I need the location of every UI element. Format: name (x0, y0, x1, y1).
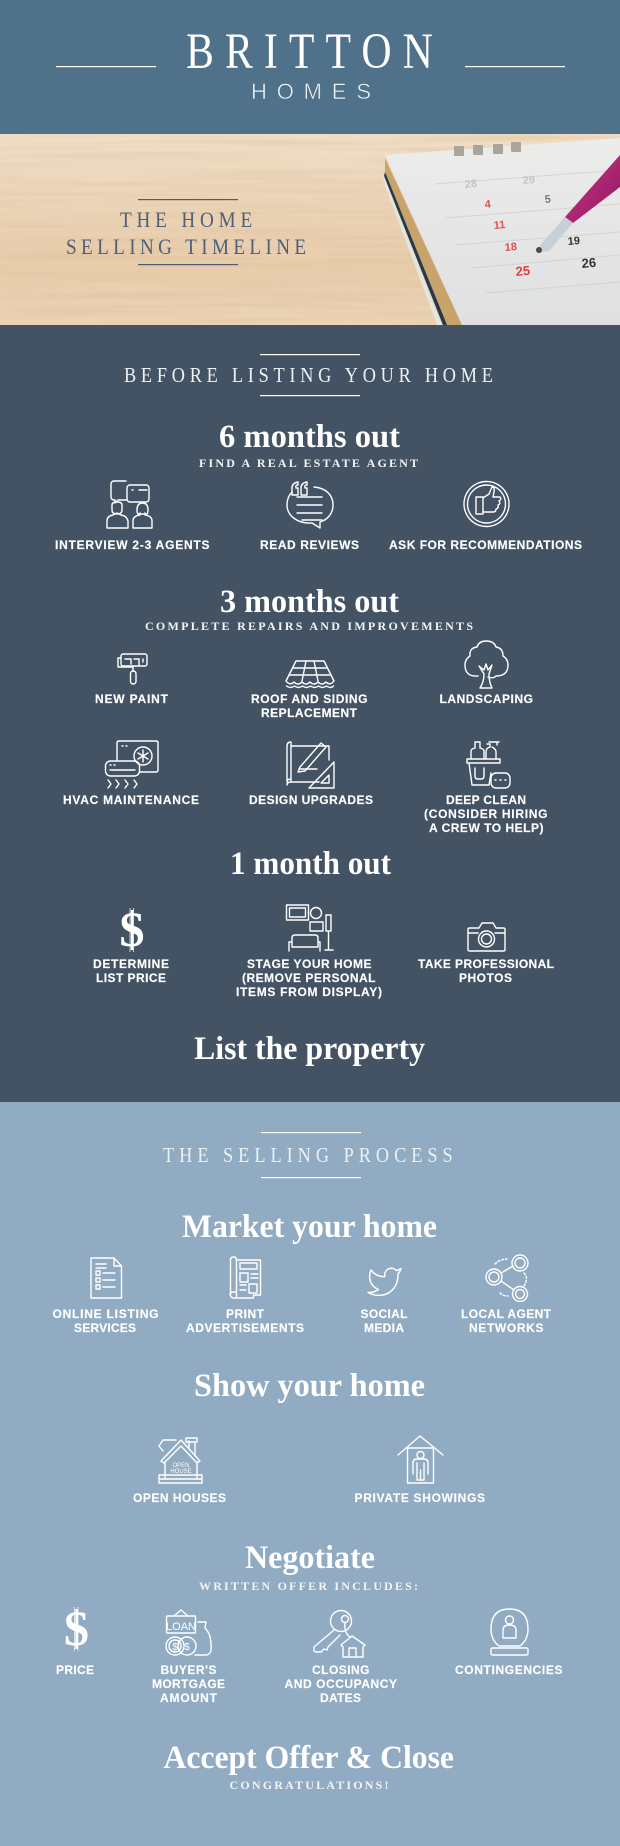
icon: tree (465, 641, 508, 688)
icon: house key (314, 1610, 365, 1657)
icon: open house: HOUSE (170, 1469, 192, 1475)
step: online listing services (52, 1258, 158, 1335)
panel: before listing your home (0, 325, 620, 1102)
label (461, 1307, 552, 1335)
label (236, 957, 382, 999)
label: PRICE (56, 1663, 94, 1677)
step: buyer's mortgage amount (152, 1610, 225, 1705)
label: MORTGAGE (152, 1677, 225, 1691)
heading: show your home: Show your home (194, 1368, 425, 1404)
subheading: find an agent: FIND A REAL ESTATE AGENT (199, 456, 418, 470)
label: MEDIA (364, 1321, 404, 1335)
icon: blueprint, pencil and set square (287, 742, 334, 788)
label (186, 1307, 304, 1335)
panel: hero photo with calendar: 19 (567, 235, 580, 248)
subheading: written offer: WRITTEN OFFER INCLUDES: (199, 1579, 418, 1593)
label: LIST PRICE (96, 971, 166, 985)
step: landscaping (440, 641, 533, 706)
step: private showings (354, 1436, 485, 1505)
step: local agent networks (461, 1255, 552, 1335)
label: ITEMS FROM DISPLAY) (236, 985, 382, 999)
icon: dollar sign: $ (64, 1600, 89, 1656)
heading: market your home: Market your home (182, 1209, 437, 1245)
step: read reviews (260, 482, 359, 552)
icon: document checklist (91, 1258, 122, 1298)
heading: negotiate: Negotiate (245, 1540, 375, 1576)
icon: cleaning bucket (467, 742, 510, 788)
panel: header (0, 0, 620, 134)
panel: hero photo with calendar (0, 134, 620, 325)
panel: hero photo with calendar: 29 (522, 174, 535, 187)
section heading: before listing: BEFORE LISTING YOUR HOME (124, 364, 493, 387)
panel: hero photo with calendar: 28 (464, 178, 477, 191)
step: design upgrades (249, 742, 373, 807)
icon: person in house (398, 1436, 443, 1483)
icon: dollar sign: $ (120, 901, 144, 957)
label: ASK FOR RECOMMENDATIONS (389, 538, 582, 552)
label: CLOSING (312, 1663, 370, 1677)
step: price (56, 1600, 94, 1677)
label: DESIGN UPGRADES (249, 793, 373, 807)
icon: loan sign and money: LOAN (166, 1621, 196, 1633)
step: contingencies (455, 1609, 562, 1677)
step: professional photos (418, 923, 554, 985)
step: social media (360, 1268, 408, 1335)
step: hvac maintenance (63, 741, 199, 807)
logo: Britton: BRITTON (186, 23, 433, 80)
logo: Homes: HOMES (251, 79, 371, 104)
label: LOCAL AGENT (461, 1307, 552, 1321)
label (284, 1663, 397, 1705)
label: REPLACEMENT (261, 706, 358, 720)
label: PRINT (226, 1307, 265, 1321)
panel: hero photo with calendar: 5 (544, 194, 551, 206)
label: SOCIAL (360, 1307, 408, 1321)
panel: the selling process (0, 1102, 620, 1846)
heading: 1 month out: 1 month out (230, 846, 391, 882)
label: INTERVIEW 2-3 AGENTS (55, 538, 210, 552)
label: DATES (320, 1691, 361, 1705)
panel: hero photo with calendar: 25 (515, 263, 531, 279)
icon: loan sign and money: $ (184, 1642, 190, 1653)
label: TAKE PROFESSIONAL (418, 957, 554, 971)
panel: hero photo with calendar: 4 (484, 198, 492, 211)
label: STAGE YOUR HOME (247, 957, 372, 971)
label: (REMOVE PERSONAL (242, 971, 376, 985)
icon: air conditioner (106, 741, 158, 788)
step: roof and siding (251, 661, 368, 720)
step: print advertisements (186, 1257, 304, 1335)
panel: hero photo with calendar: 11 (493, 219, 506, 232)
step: stage your home (236, 905, 382, 999)
icon: staged living room (286, 905, 333, 951)
step: open houses (133, 1438, 226, 1505)
label (93, 957, 169, 985)
subheading: repairs: COMPLETE REPAIRS AND IMPROVEMENTS (145, 619, 473, 633)
icon: paint roller (118, 654, 147, 684)
icon: share network (486, 1255, 528, 1302)
label (424, 793, 548, 835)
hero title: SELLING TIMELINE (66, 236, 306, 259)
icon: loan sign and money: $ (172, 1642, 178, 1653)
label: (CONSIDER HIRING (424, 807, 548, 821)
label (152, 1663, 225, 1705)
label (418, 957, 554, 985)
label: ROOF AND SIDING (251, 692, 368, 706)
step: ask for recommendations (389, 482, 582, 552)
label: OPEN HOUSES (133, 1491, 226, 1505)
label: CONTINGENCIES (455, 1663, 562, 1677)
label: ONLINE LISTING (52, 1307, 158, 1321)
hero title (66, 199, 306, 265)
heading: 3 months out: 3 months out (220, 584, 399, 620)
label: DEEP CLEAN (446, 793, 526, 807)
label: READ REVIEWS (260, 538, 359, 552)
label (251, 692, 368, 720)
section heading: selling process: THE SELLING PROCESS (163, 1144, 453, 1167)
label: SERVICES (74, 1321, 136, 1335)
label: HVAC MAINTENANCE (63, 793, 199, 807)
icon: open house (159, 1438, 202, 1483)
icon: twitter bird (368, 1268, 401, 1295)
step: deep clean (424, 742, 548, 835)
label: BUYER'S (160, 1663, 216, 1677)
label (360, 1307, 408, 1335)
label: A CREW TO HELP) (429, 821, 544, 835)
step: new paint (95, 654, 169, 706)
label: NEW PAINT (95, 692, 169, 706)
icon: tiled roof (286, 661, 334, 688)
label: DETERMINE (93, 957, 169, 971)
label: ADVERTISEMENTS (186, 1321, 304, 1335)
hero title: THE HOME (120, 209, 252, 232)
panel: hero photo with calendar: 26 (581, 255, 597, 271)
label: NETWORKS (469, 1321, 544, 1335)
icon: thumbs up badge (464, 482, 509, 526)
heading: accept offer and close: Accept Offer & Close (164, 1740, 454, 1776)
step: closing and occupancy dates (284, 1610, 397, 1705)
icon: open house: OPEN (172, 1463, 190, 1469)
subheading: congratulations: CONGRATULATIONS! (230, 1778, 388, 1792)
label: PRIVATE SHOWINGS (354, 1491, 485, 1505)
step: interview agents (55, 481, 210, 552)
icon: loan sign and money (166, 1610, 211, 1655)
label: PHOTOS (459, 971, 512, 985)
icon: speech bubble with quotes (287, 482, 333, 528)
icon: crystal ball (491, 1609, 528, 1655)
label: AND OCCUPANCY (284, 1677, 397, 1691)
label: LANDSCAPING (440, 692, 533, 706)
label (52, 1307, 158, 1335)
label: AMOUNT (160, 1691, 218, 1705)
panel: hero photo with calendar: 18 (504, 241, 517, 254)
icon: camera (468, 923, 505, 951)
step: determine list price (93, 901, 169, 985)
icon: two people talking (107, 481, 152, 528)
icon: newspaper (230, 1257, 260, 1298)
heading: list the property: List the property (194, 1031, 425, 1067)
heading: 6 months out: 6 months out (219, 419, 400, 455)
